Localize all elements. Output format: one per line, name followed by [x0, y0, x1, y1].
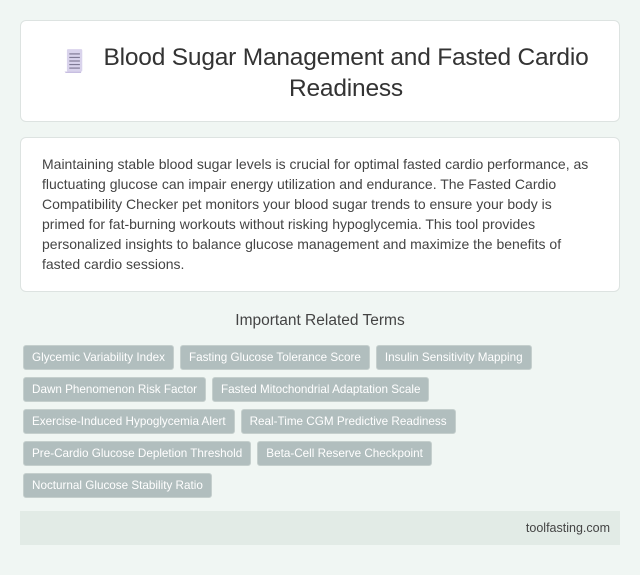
- tags: Exercise-Induced Hypoglycemia Alert: [32, 415, 226, 428]
- title card: [20, 20, 620, 122]
- footer: toolfasting.com: [526, 521, 610, 535]
- tags: Dawn Phenomenon Risk Factor: [32, 383, 197, 396]
- tags: Nocturnal Glucose Stability Ratio: [32, 479, 203, 492]
- tags: Pre-Cardio Glucose Depletion Threshold: [32, 447, 242, 460]
- tags: [23, 345, 532, 498]
- tags: Fasting Glucose Tolerance Score: [189, 351, 361, 364]
- description panel: [20, 137, 620, 292]
- tags: Fasted Mitochondrial Adaptation Scale: [221, 383, 420, 396]
- icon: document: [64, 49, 82, 73]
- tags: Beta-Cell Reserve Checkpoint: [266, 447, 423, 460]
- tags: Insulin Sensitivity Mapping: [385, 351, 523, 364]
- title: Blood Sugar Management and Fasted Cardio Readiness: [103, 44, 589, 102]
- tags: Real-Time CGM Predictive Readiness: [250, 415, 447, 428]
- tags: Glycemic Variability Index: [32, 351, 165, 364]
- description panel: Maintaining stable blood sugar levels is crucial for optimal fasted cardio performance, as fluctuating glucose can impair energy utilization and endurance. The Fasted Cardio Compatibility Checker pet monitors your blood sugar trends to ensure your body is primed for fat-burning workouts without risking hypoglycemia. This tool provides personalized insights to balance glucose management and maximize the benefits of fasted cardio sessions.: [42, 156, 588, 272]
- footer: [20, 511, 620, 545]
- heading: related terms: Important Related Terms: [235, 312, 405, 329]
